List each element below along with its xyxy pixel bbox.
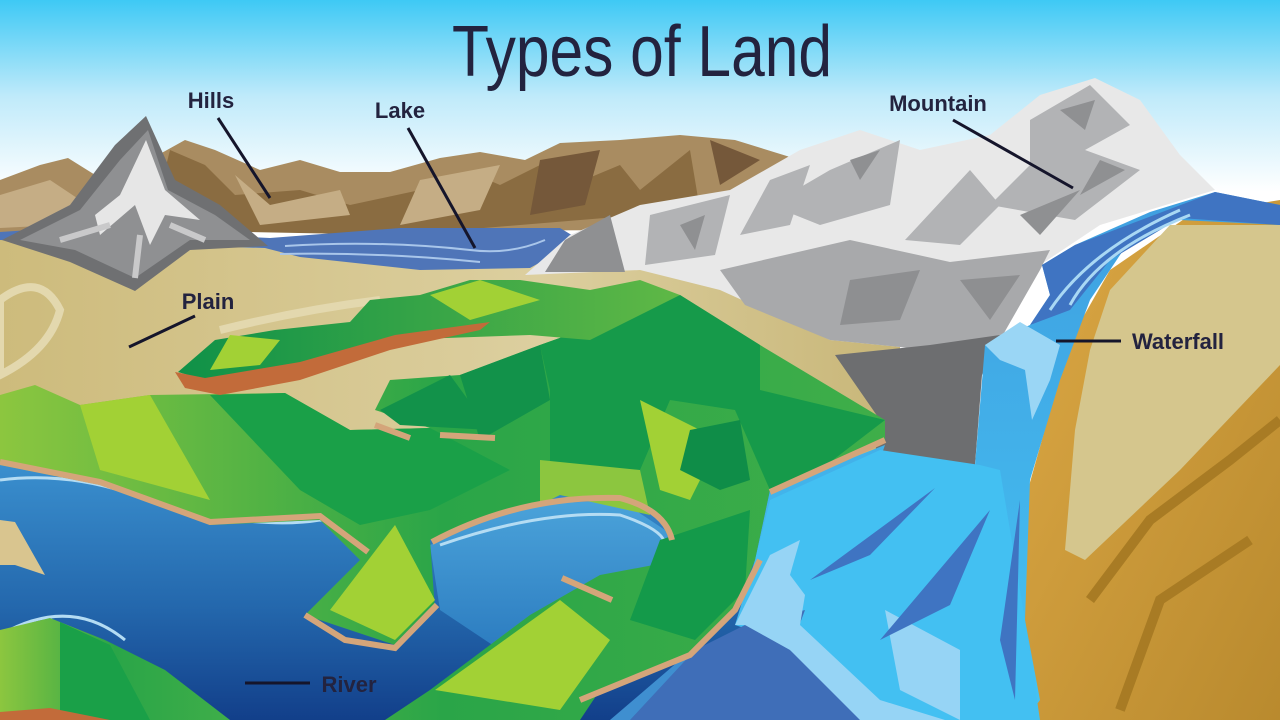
shoreline sand <box>0 425 885 700</box>
label: Mountain: Mountain <box>889 91 987 116</box>
peak: left grey mountain <box>2 116 268 291</box>
label: Lake <box>375 98 475 248</box>
ice lower bank <box>630 488 1020 720</box>
label: River <box>245 672 377 697</box>
label: River: River <box>321 672 377 697</box>
main lower water <box>740 450 1040 720</box>
label: Waterfall: Waterfall <box>1132 329 1224 354</box>
green hills main land <box>0 295 885 720</box>
upper river and waterfall <box>735 192 1280 720</box>
grey cliff <box>835 335 1000 488</box>
hills range <box>0 135 790 235</box>
bay and river deep water <box>0 465 800 720</box>
label: Hills <box>188 88 270 198</box>
title: Types of Land <box>452 12 832 92</box>
plain <box>0 238 900 480</box>
lower left island <box>0 618 230 720</box>
right bank: sand cliff <box>1022 200 1280 720</box>
label: Lake: Lake <box>375 98 425 123</box>
lake <box>0 228 580 270</box>
label: Plain: Plain <box>182 289 234 314</box>
label: Plain <box>129 289 234 347</box>
snowy mountain range <box>525 78 1215 350</box>
label: Mountain <box>889 91 1073 188</box>
label: Hills: Hills <box>188 88 234 113</box>
green plateau strip <box>175 280 680 395</box>
sky background <box>0 0 1280 240</box>
